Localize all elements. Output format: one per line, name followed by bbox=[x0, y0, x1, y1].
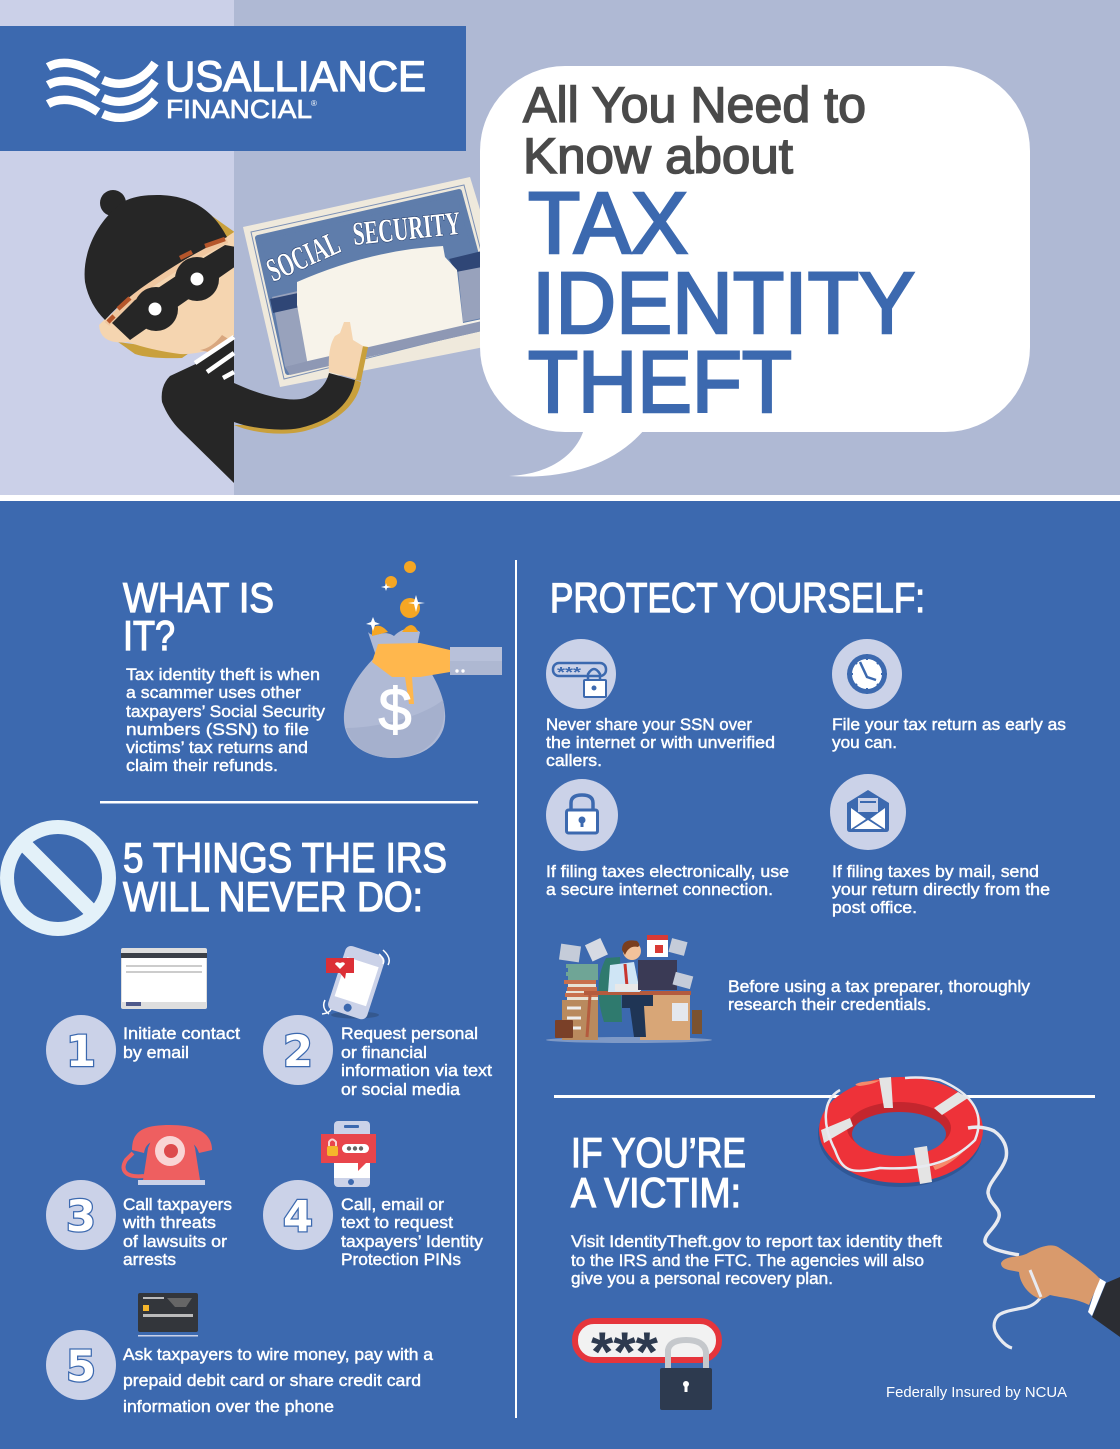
text bbox=[546, 862, 789, 899]
title line 2: Know about bbox=[523, 128, 793, 184]
number 4 bbox=[263, 1180, 333, 1250]
text 1 bbox=[123, 1024, 240, 1062]
tip: tax preparer bbox=[546, 935, 1031, 1043]
thief neck bbox=[200, 335, 230, 353]
thief face bbox=[99, 232, 234, 354]
text 5: information over the phone bbox=[123, 1397, 334, 1416]
logo registered mark: ® bbox=[311, 99, 317, 108]
number 3: 3 bbox=[66, 1192, 96, 1242]
logo subline: FINANCIAL bbox=[166, 94, 312, 124]
text 2: Request personal bbox=[341, 1024, 478, 1043]
tip: secure connection bbox=[546, 779, 789, 899]
icon: phone with notification bbox=[322, 944, 389, 1021]
text: Never share your SSN over bbox=[546, 715, 752, 734]
text 3 bbox=[122, 1195, 232, 1269]
title: identity: IDENTITY bbox=[532, 255, 915, 352]
heading: protect yourself: PROTECT YOURSELF: bbox=[550, 574, 925, 621]
logo wordmark: USALLIANCE bbox=[165, 53, 426, 101]
icon: rotary telephone bbox=[124, 1125, 212, 1185]
heading: victim: IF YOU’RE bbox=[571, 1129, 746, 1176]
text: If filing taxes by mail, send bbox=[832, 862, 1039, 881]
tip: file early bbox=[832, 639, 1066, 752]
text: post office. bbox=[832, 898, 917, 917]
panel: what is it bbox=[123, 561, 502, 775]
icon: prohibition sign bbox=[7, 827, 109, 929]
text: research their credentials. bbox=[728, 995, 931, 1014]
divider center bbox=[515, 560, 517, 1418]
icon: credit card bbox=[138, 1293, 198, 1336]
text 4: Call, email or bbox=[341, 1195, 444, 1214]
tip: share ssn bbox=[546, 639, 775, 770]
heading: what is it bbox=[123, 574, 274, 659]
icon: password and padlock bbox=[575, 1320, 719, 1410]
heading: five things: 5 THINGS THE IRS bbox=[123, 834, 447, 881]
icon: clock bbox=[832, 639, 902, 709]
number 1 bbox=[46, 1015, 116, 1085]
text 4: text to request bbox=[341, 1213, 453, 1232]
text 4 bbox=[341, 1195, 484, 1269]
panel: five things bbox=[7, 827, 492, 1416]
text bbox=[832, 862, 1050, 917]
thief hand bbox=[329, 322, 368, 381]
illustration: overwhelmed accountant bbox=[546, 935, 712, 1043]
text bbox=[832, 715, 1066, 752]
number 2 bbox=[263, 1015, 333, 1085]
icon: phone with lock message bbox=[321, 1121, 376, 1187]
item 4 bbox=[263, 1121, 484, 1269]
tip: mail bbox=[830, 774, 1050, 917]
icon: password lock bbox=[546, 639, 616, 709]
footer note: Federally Insured by NCUA bbox=[886, 1384, 1067, 1401]
card title: SECURITY bbox=[351, 206, 462, 253]
heading: victim: A VICTIM: bbox=[571, 1169, 741, 1216]
text: definition: Tax identity theft is when bbox=[126, 665, 320, 684]
number 5: 5 bbox=[66, 1342, 96, 1392]
text: definition: numbers (SSN) to file bbox=[126, 720, 309, 739]
text: File your tax return as early as bbox=[832, 715, 1066, 734]
illustration: social security card bbox=[243, 177, 520, 387]
number 4: 4 bbox=[283, 1192, 313, 1242]
icon: life ring bbox=[818, 1077, 983, 1187]
icon: logo waves bbox=[48, 63, 155, 118]
number 3 bbox=[46, 1180, 116, 1250]
text: definition: a scammer uses other bbox=[126, 683, 301, 702]
text 4: taxpayers’ Identity bbox=[341, 1232, 484, 1251]
heading: five things bbox=[123, 834, 447, 920]
title: theft: THEFT bbox=[528, 334, 792, 431]
heading: victim bbox=[571, 1129, 746, 1216]
text 2: or social media bbox=[341, 1080, 461, 1099]
title: tax: TAX bbox=[528, 175, 688, 272]
lower panel background bbox=[0, 501, 1120, 1449]
item 5 bbox=[46, 1293, 434, 1416]
text 5: Ask taxpayers to wire money, pay with a bbox=[123, 1345, 434, 1364]
thief mask bbox=[112, 245, 236, 340]
divider left bbox=[100, 801, 478, 804]
panel: protect yourself bbox=[546, 574, 1066, 1043]
text: definition: victims’ tax returns and bbox=[126, 738, 308, 757]
number 1: 1 bbox=[66, 1027, 96, 1077]
text bbox=[728, 977, 1031, 1014]
number 5 bbox=[46, 1330, 116, 1400]
icon: rope and hand bbox=[826, 1077, 1120, 1348]
icon: envelope bbox=[830, 774, 906, 850]
panel: if you're a victim bbox=[571, 1077, 1120, 1410]
thief body bbox=[162, 336, 355, 483]
text 1: Initiate contact bbox=[123, 1024, 240, 1043]
text 2: information via text bbox=[341, 1061, 492, 1080]
thief hat bbox=[85, 190, 227, 320]
speech bubble bbox=[480, 66, 1030, 477]
text: definition bbox=[126, 665, 326, 775]
text: the internet or with unverified bbox=[546, 733, 775, 752]
text: you can. bbox=[832, 733, 897, 752]
text 5: prepaid debit card or share credit card bbox=[123, 1371, 421, 1390]
text 1: by email bbox=[123, 1043, 189, 1062]
thief hair bbox=[118, 211, 236, 358]
icon: money bag and hand: $ bbox=[378, 676, 412, 743]
thief arm shadow bbox=[234, 380, 361, 434]
text: If filing taxes electronically, use bbox=[546, 862, 789, 881]
icon: password and padlock: *** bbox=[591, 1320, 658, 1383]
icon: padlock bbox=[546, 779, 618, 851]
logo banner bbox=[0, 26, 466, 151]
text 3: of lawsuits or bbox=[123, 1232, 227, 1251]
item 2 bbox=[263, 944, 492, 1099]
text 2: or financial bbox=[341, 1043, 427, 1062]
text: victim advice: to the IRS and the FTC. The agencies will also bbox=[571, 1251, 924, 1270]
text bbox=[546, 715, 775, 770]
icon: money bag and hand bbox=[344, 561, 502, 758]
card title: SOCIAL bbox=[262, 226, 346, 289]
text: your return directly from the bbox=[832, 880, 1050, 899]
heading: what is it: WHAT IS bbox=[123, 574, 274, 621]
text: definition: taxpayers’ Social Security bbox=[126, 702, 326, 721]
icon: email window bbox=[121, 948, 207, 1009]
text: definition: claim their refunds. bbox=[126, 756, 278, 775]
illustration: thief bbox=[85, 190, 368, 483]
text 4: Protection PINs bbox=[341, 1250, 461, 1269]
text: a secure internet connection. bbox=[546, 880, 773, 899]
text: callers. bbox=[546, 751, 602, 770]
header background bbox=[0, 0, 1120, 501]
item 3 bbox=[46, 1125, 232, 1269]
item 1 bbox=[46, 948, 240, 1085]
card title bbox=[262, 206, 462, 289]
text: victim advice bbox=[571, 1232, 942, 1288]
number 2: 2 bbox=[283, 1027, 313, 1077]
thief hair band bbox=[107, 240, 227, 324]
text: victim advice: give you a personal recovery plan. bbox=[571, 1269, 833, 1288]
heading: five things: WILL NEVER DO: bbox=[123, 873, 423, 920]
title line 1: All You Need to bbox=[523, 77, 866, 133]
text 5 bbox=[123, 1345, 434, 1416]
text 3: with threats bbox=[122, 1213, 216, 1232]
divider right bbox=[554, 1095, 1095, 1098]
text: victim advice: Visit IdentityTheft.gov to report tax identity theft bbox=[571, 1232, 942, 1251]
text: Before using a tax preparer, thoroughly bbox=[728, 977, 1031, 996]
text 3: Call taxpayers bbox=[123, 1195, 232, 1214]
icon: password lock: *** bbox=[557, 664, 581, 681]
text 3: arrests bbox=[123, 1250, 176, 1269]
heading: what is it: IT? bbox=[123, 612, 175, 659]
text 2 bbox=[341, 1024, 492, 1099]
